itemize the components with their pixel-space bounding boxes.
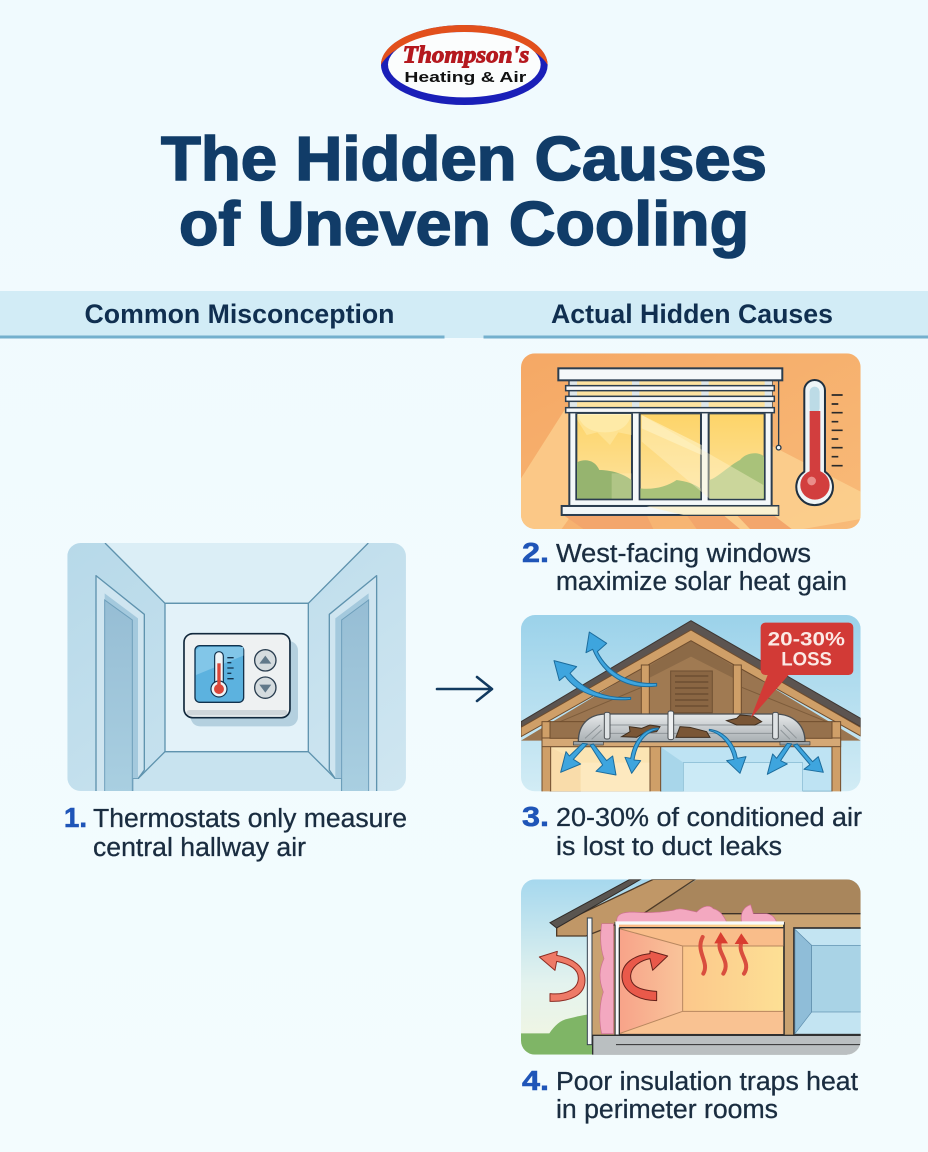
callout: 20-30% loss: LOSS [781,650,832,671]
caption 1: central hallway air [93,834,307,862]
floor [117,752,356,792]
roof shingles [521,621,861,727]
sun [577,414,631,432]
panel: west-facing window [521,353,861,529]
window panes [576,413,632,499]
wavy heat lines [700,937,746,974]
caption 2: 2. [522,537,549,568]
attic [643,879,861,914]
panel: duct leaks in attic [521,615,861,793]
attic [521,651,860,741]
roof [557,879,695,936]
beams through glass [642,415,702,455]
thermometer glyph [215,652,223,687]
caption 2: maximize solar heat gain [556,568,847,596]
caption 4: in perimeter rooms [556,1096,778,1124]
logo: Thompson's Heating & Air [381,25,548,105]
icon: thermostat [184,634,298,726]
caption 3: 20-30% of conditioned air [556,804,863,832]
title: The Hidden Causes [161,125,767,194]
logo: Thompson's Heating & Air: Heating & Air [404,70,527,86]
attic vent [671,671,712,713]
struts [641,665,649,714]
window frame [569,380,772,506]
main room [615,923,784,1035]
caption 3: 3. [522,801,549,832]
hills [577,460,631,499]
caption 4: Poor insulation traps heat [556,1068,858,1096]
heading: common misconception: Common Misconception [84,299,394,329]
vent boots [573,742,603,745]
duct holes [622,725,660,737]
title [161,125,767,259]
roof fascia [521,630,861,737]
beams and studs [542,722,551,793]
arrows: heat [539,951,668,1001]
heading: actual hidden causes: Actual Hidden Causes [551,299,833,329]
caption 2: West-facing windows [556,540,811,568]
foundation [593,1035,863,1055]
down button [255,677,276,698]
arrow [437,677,492,701]
icon: thermometer [796,380,843,505]
rooms [550,747,650,791]
callout: 20-30% loss: 20-30% [768,630,845,651]
caption 2 [522,537,847,596]
caption 3: is lost to duct leaks [556,833,782,861]
ceiling [105,543,368,603]
caption 1: 1. [64,802,87,833]
outer wall [587,918,592,1045]
blinds [570,380,772,413]
grass [521,1014,593,1055]
cord [778,381,780,445]
panel: hallway thermostat [67,543,406,792]
panel: poor insulation [521,879,864,1055]
title: of Uneven Cooling [179,190,749,259]
right door [329,576,377,792]
caption 4: 4. [522,1065,549,1096]
insulation [617,905,777,922]
left door [96,576,144,792]
callout: 20-30% loss [751,623,853,718]
caption 4 [522,1065,858,1124]
sill [562,506,778,515]
house frame [587,914,861,1037]
duct [573,711,810,745]
neighboring room [794,928,864,1035]
caption 3 [522,801,863,861]
arrows: escaping air [554,632,823,775]
caption 1 [64,802,407,862]
header band [0,291,928,338]
logo: Thompson's Heating & Air: Thompson's [403,42,529,69]
up button [255,650,276,671]
caption 1: Thermostats only measure [93,805,407,833]
back wall [165,603,308,752]
sun rays on wall [521,406,569,529]
